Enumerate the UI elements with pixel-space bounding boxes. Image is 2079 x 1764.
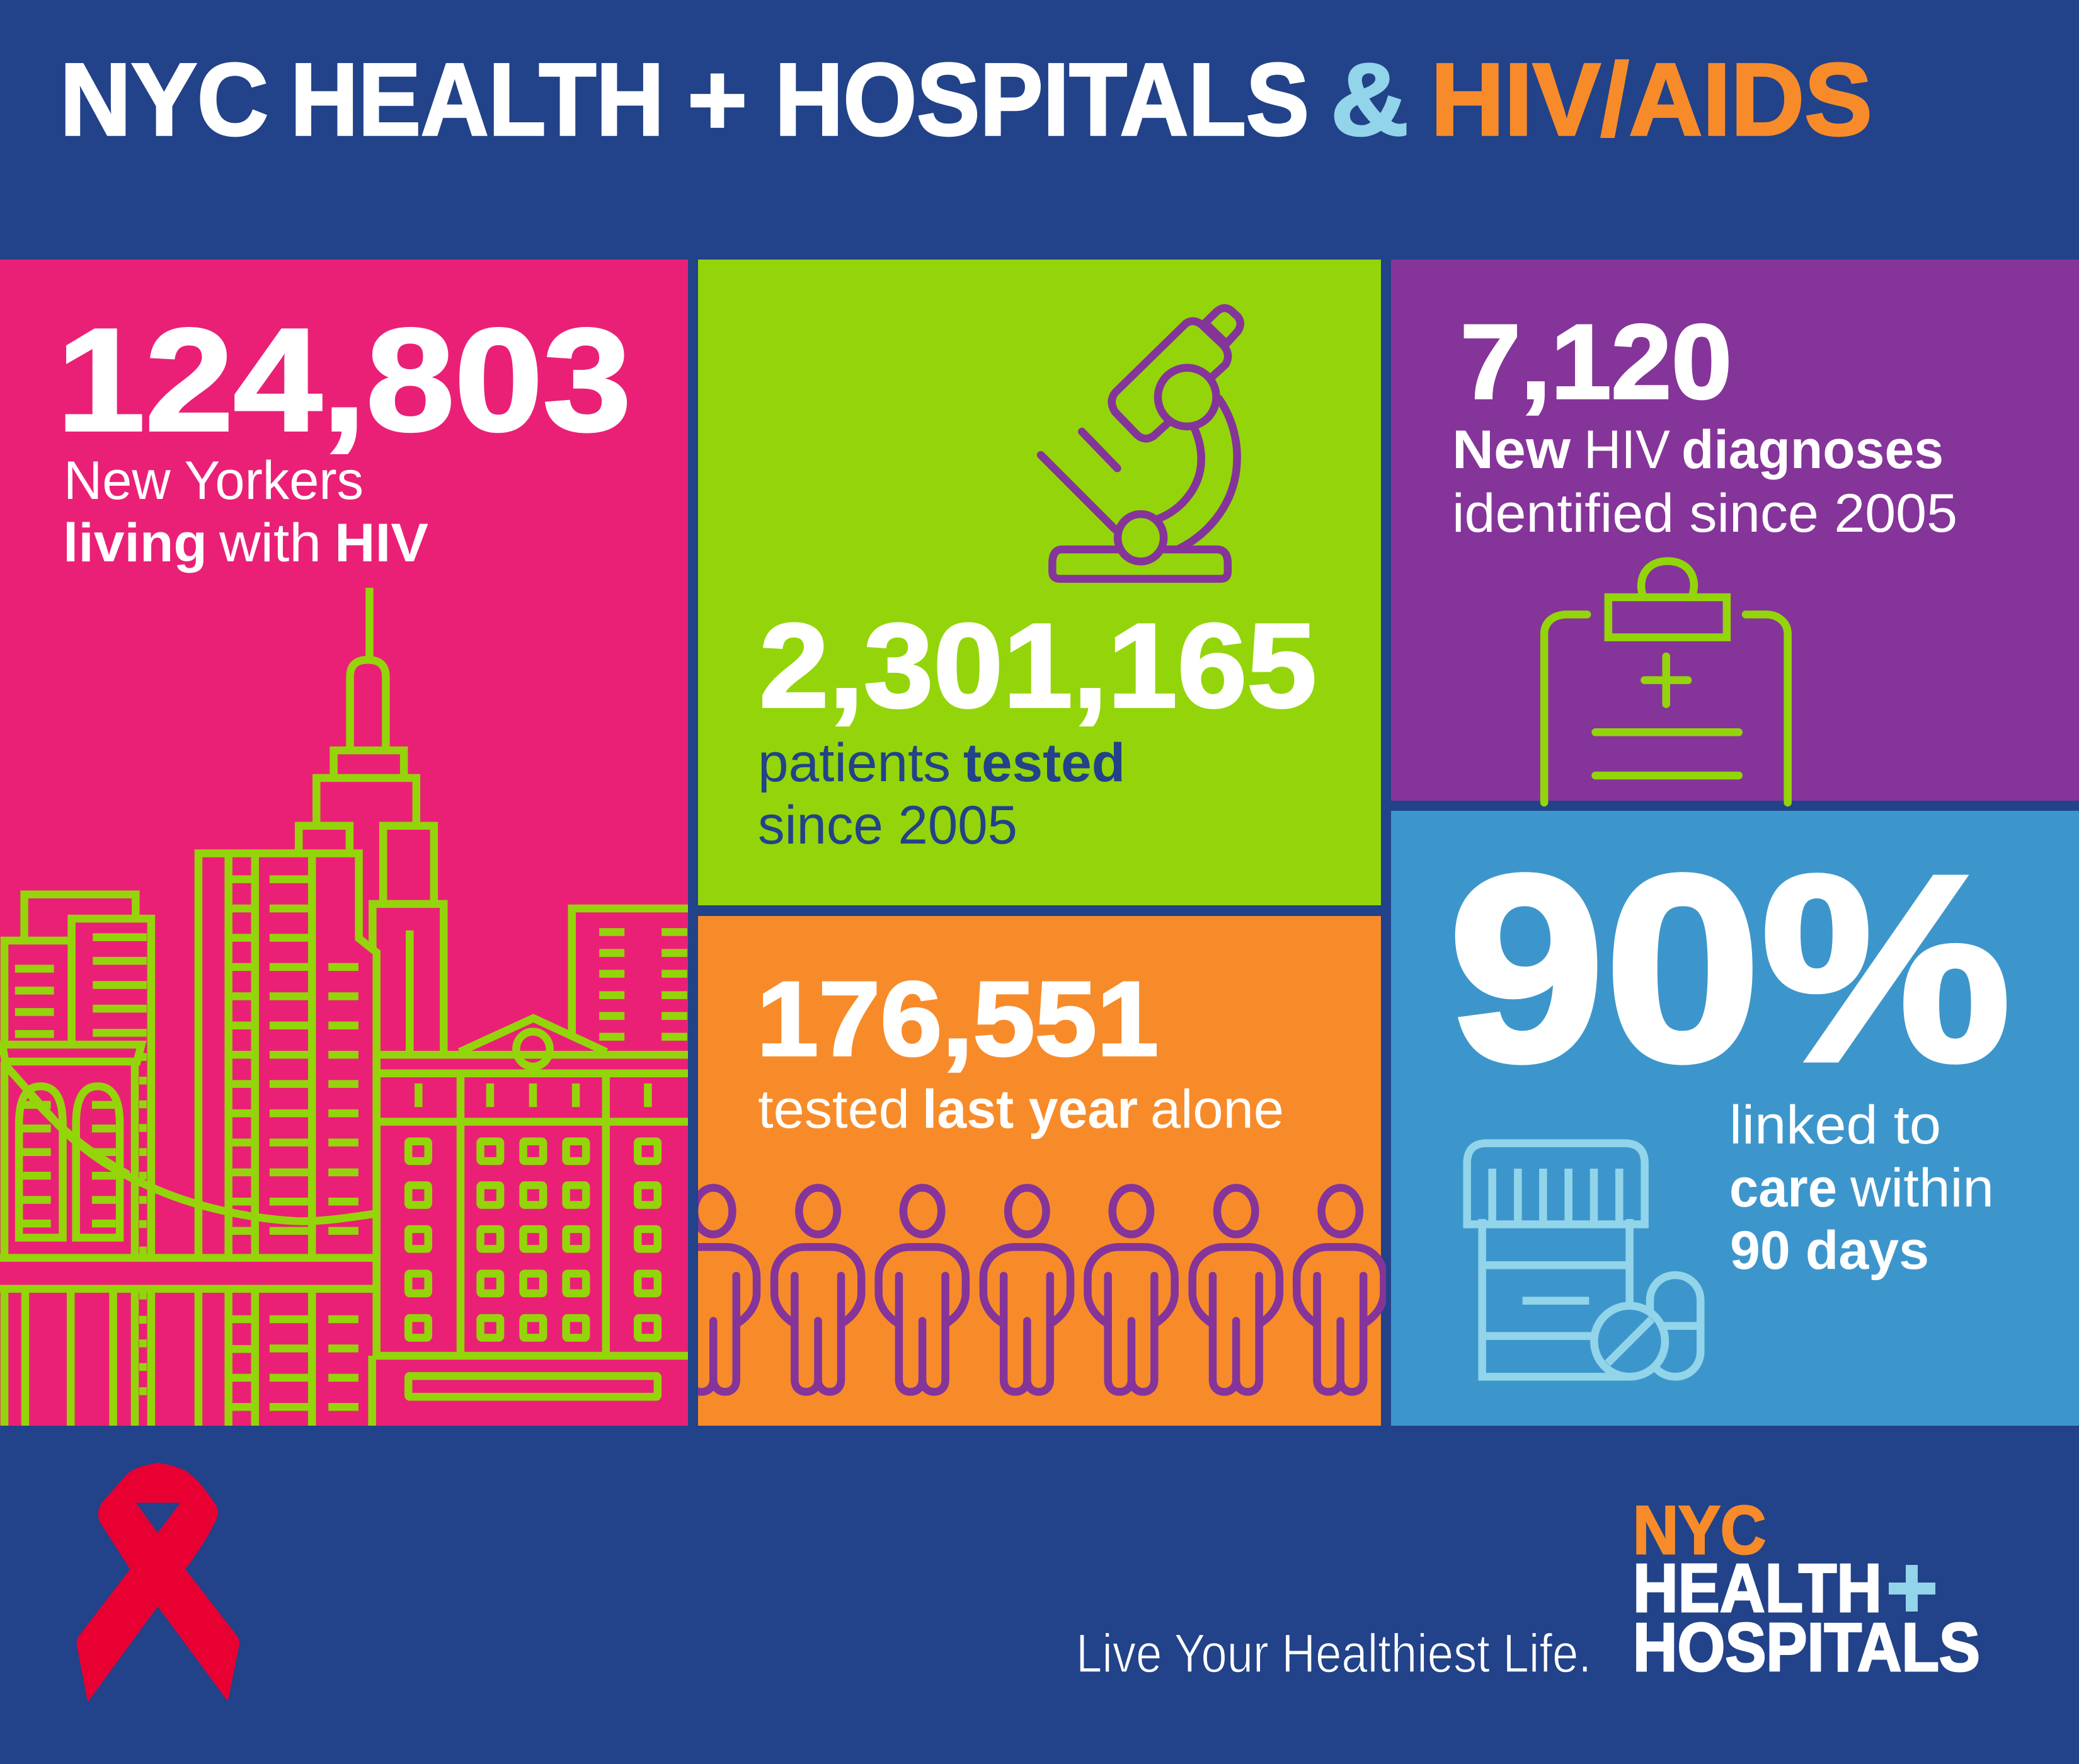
caption: linked to care within 90 days: 90 days <box>1730 1220 1929 1281</box>
stat: 7,120: 7,120 <box>1460 302 1732 421</box>
title: HEALTH <box>290 42 664 157</box>
stat: 90%: 90% <box>1448 821 2011 1116</box>
caption: new HIV diagnoses identified since 2005: identified since 2005 <box>1452 483 1957 544</box>
caption: New Yorkers living with HIV: with <box>219 513 321 573</box>
caption: linked to care within 90 days: care <box>1729 1158 1837 1218</box>
caption: New Yorkers living with HIV: living <box>63 513 207 573</box>
title: + <box>687 42 747 157</box>
panel: patients tested <box>698 260 1381 905</box>
caption: tested last year alone: tested <box>758 1079 910 1140</box>
title <box>60 42 1872 157</box>
caption: New Yorkers living with HIV: HIV <box>335 513 428 573</box>
caption: tested last year alone: last year <box>922 1079 1138 1140</box>
title: HIV/AIDS <box>1431 42 1872 157</box>
icons: row of people <box>670 1188 1383 1392</box>
caption: new HIV diagnoses identified since 2005 <box>1452 420 1957 544</box>
illustration: New York skyline <box>0 588 689 1426</box>
panel: people living with HIV <box>0 260 689 1426</box>
title: HOSPITALS <box>775 42 1309 157</box>
caption: patients tested since 2005: patients <box>758 733 951 793</box>
caption: linked to care within 90 days <box>1729 1095 1994 1281</box>
caption: linked to care within 90 days: within <box>1850 1158 1994 1218</box>
icon: red AIDS ribbon <box>77 1463 239 1702</box>
caption: linked to care within 90 days: linked to <box>1729 1095 1941 1155</box>
caption: patients tested since 2005 <box>758 733 1125 856</box>
logo: NYC Health + Hospitals: NYC <box>1633 1492 1766 1569</box>
caption: New Yorkers living with HIV <box>63 450 428 573</box>
caption: patients tested since 2005: tested <box>963 733 1125 793</box>
stat: 124,803: 124,803 <box>57 299 631 462</box>
caption: tested last year alone <box>758 1079 1284 1140</box>
panel: linked to care <box>1391 811 2079 1426</box>
caption: New Yorkers living with HIV: New Yorkers <box>64 450 364 511</box>
panel: tested last year <box>670 916 1383 1426</box>
caption: new HIV diagnoses identified since 2005: diagnoses <box>1681 420 1944 480</box>
icon: pill bottle <box>1467 1143 1700 1377</box>
caption: new HIV diagnoses identified since 2005: HIV <box>1584 420 1670 480</box>
logo: NYC Health + Hospitals: HOSPITALS <box>1633 1609 1980 1686</box>
logo: NYC Health + Hospitals <box>1633 1492 1980 1686</box>
caption: patients tested since 2005: since 2005 <box>758 795 1017 856</box>
caption: tested last year alone: alone <box>1150 1079 1284 1140</box>
title: & <box>1331 42 1409 157</box>
title: NYC <box>60 42 268 157</box>
stat: 176,551: 176,551 <box>757 959 1159 1078</box>
icon: microscope <box>1041 308 1240 579</box>
stat: 2,301,165: 2,301,165 <box>759 599 1317 733</box>
tagline: Live Your Healthiest Life. <box>1076 1624 1591 1684</box>
panel: new diagnoses <box>1391 260 2079 801</box>
logo: NYC Health + Hospitals: HEALTH <box>1633 1550 1882 1627</box>
icon: clipboard <box>1544 561 1788 803</box>
caption: new HIV diagnoses identified since 2005: New <box>1452 420 1571 480</box>
